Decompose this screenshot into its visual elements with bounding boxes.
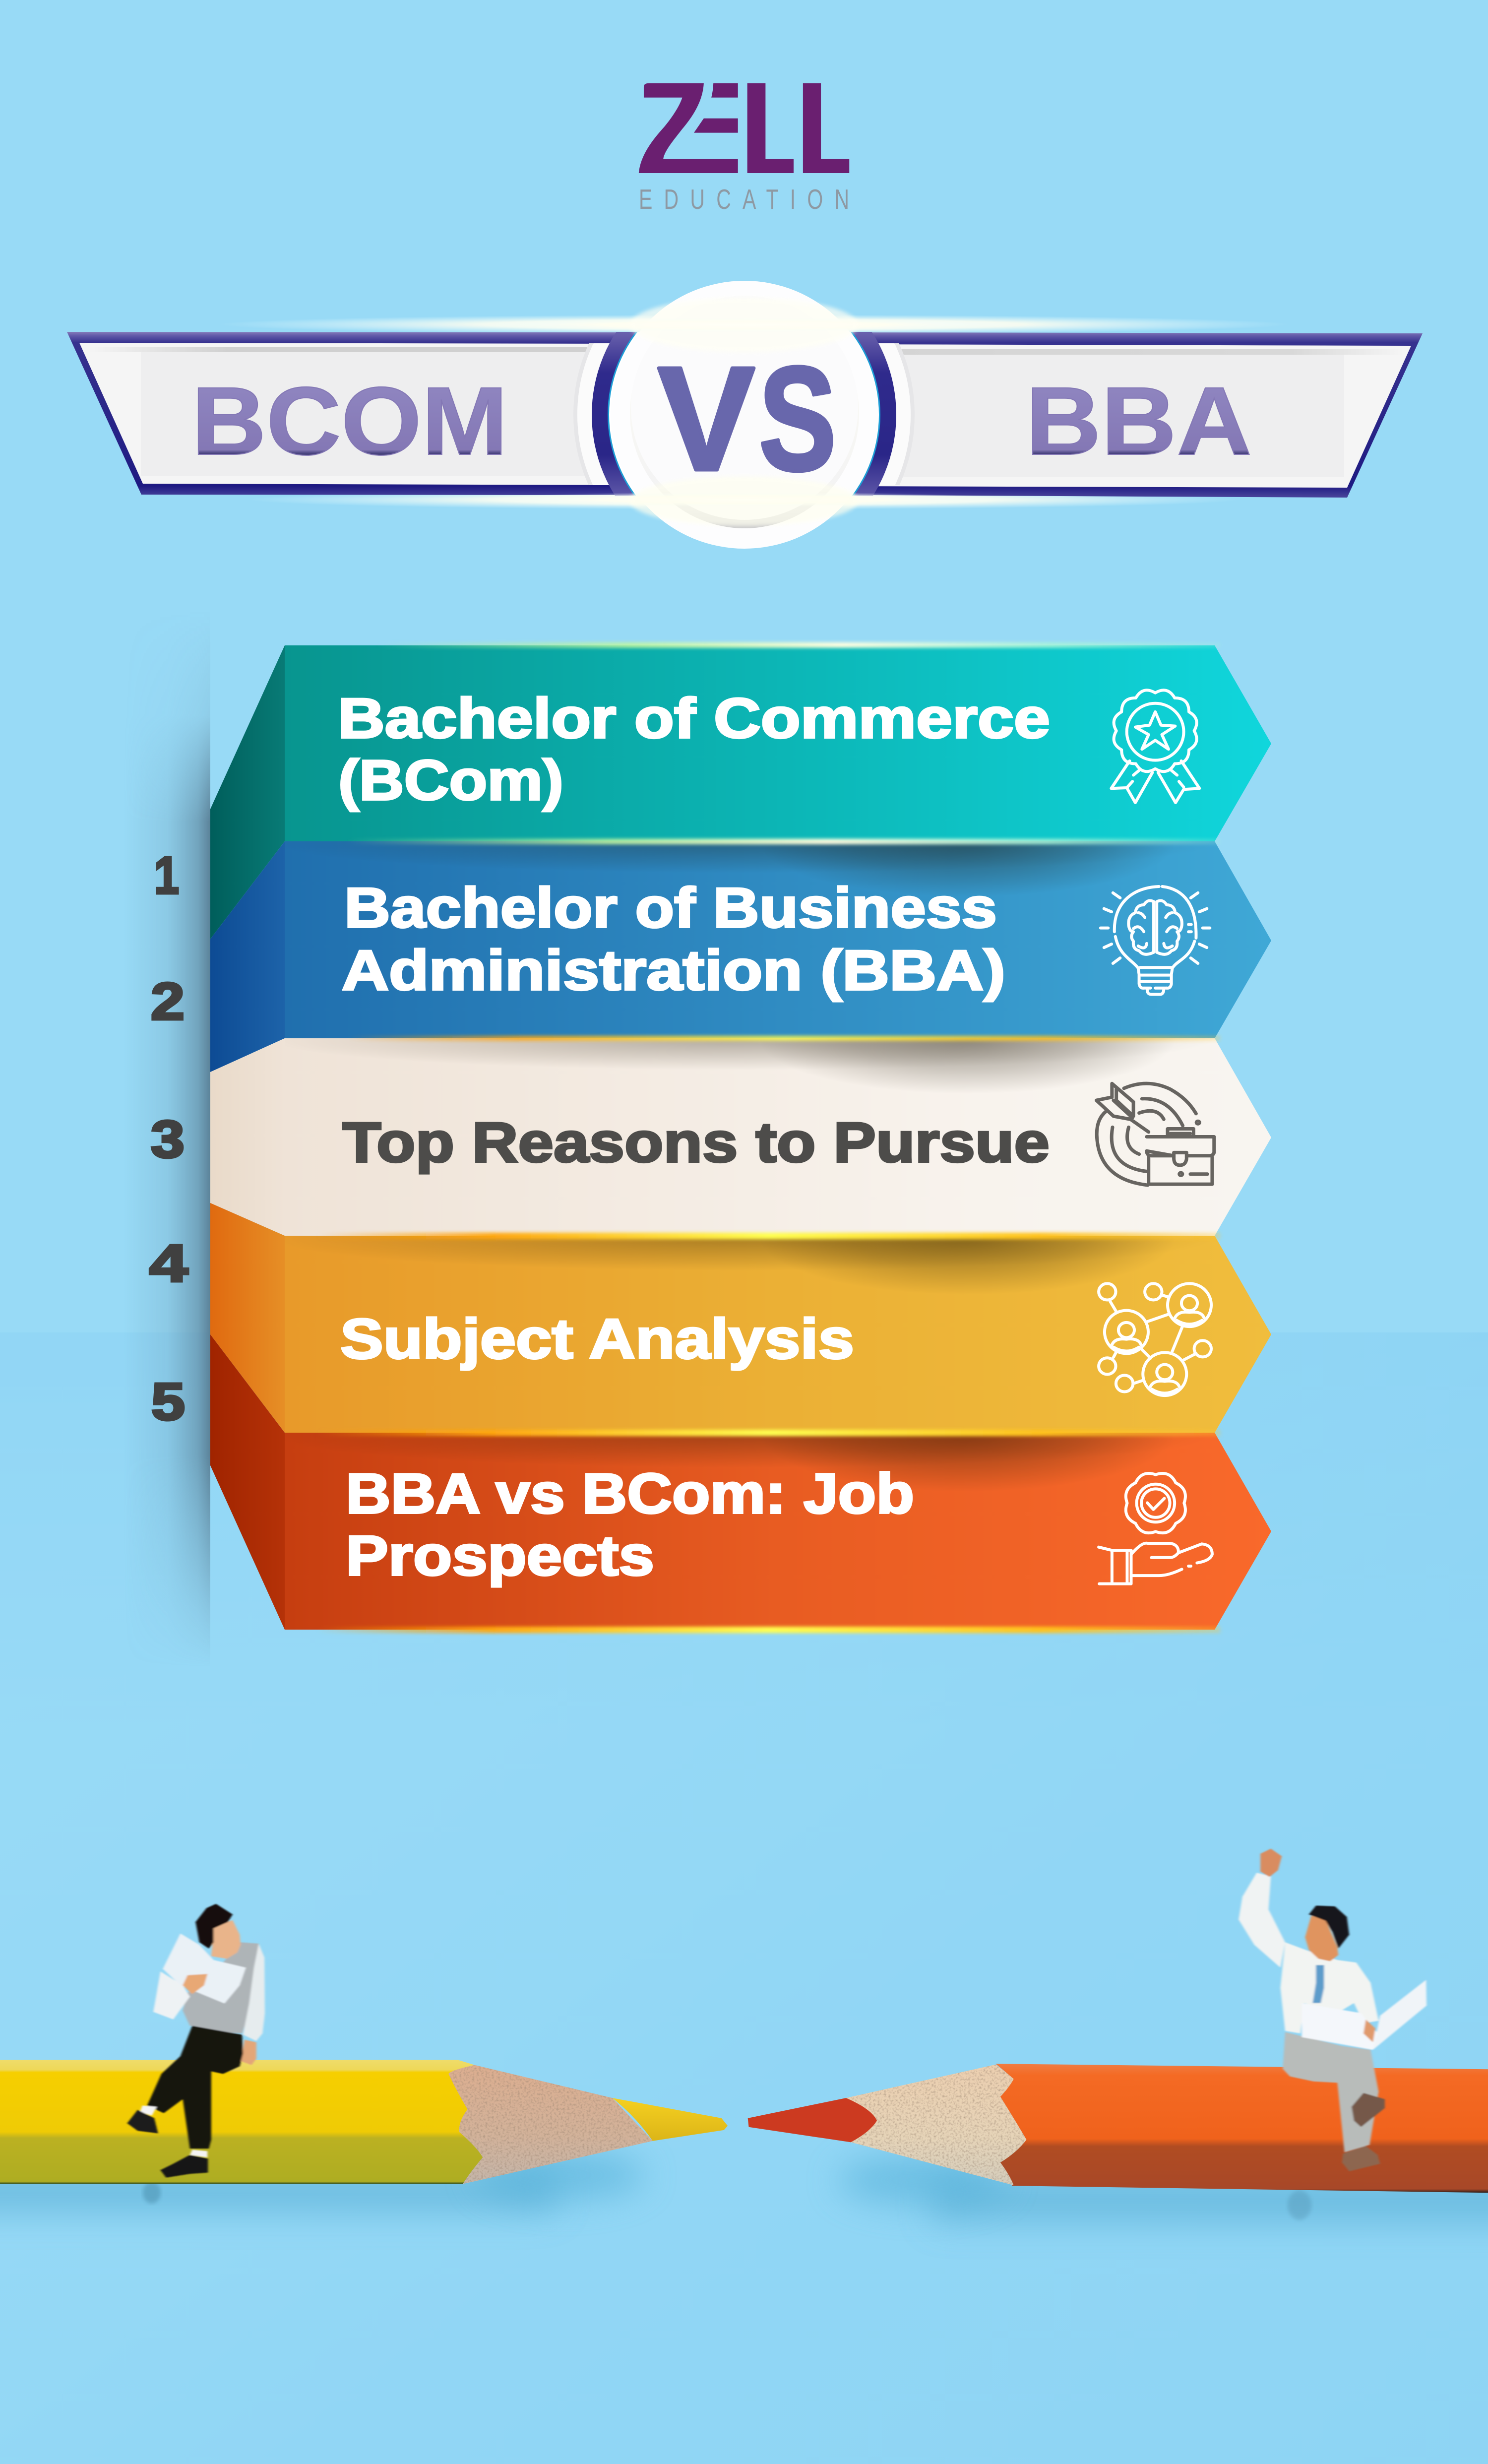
figure: man waving (1239, 1849, 1426, 2171)
panel: BCOM (67, 332, 645, 495)
panel: band 2 Bachelor of Business Administration (210, 841, 1271, 1072)
subheading: (BCom) (338, 749, 563, 812)
yellow pencil with figure (0, 1904, 728, 2184)
pencil body (995, 2064, 1488, 2193)
heading: Subject Analysis (340, 1308, 854, 1371)
icon: people network (1099, 1283, 1211, 1395)
number 2: 2 (151, 972, 185, 1031)
panel rims around disc (577, 343, 911, 485)
figure: man reading (127, 1904, 265, 2178)
panel: band 5 BBA vs BCom Job Prospects (210, 1334, 1271, 1630)
band shadow (273, 1181, 1215, 1295)
wall shadow (143, 667, 210, 1645)
panel: band 1 Bachelor of Commerce (210, 645, 1271, 939)
banner top and bottom glow (218, 315, 1290, 509)
heading: Bachelor of Commerce (338, 687, 1050, 750)
label: VS (658, 336, 836, 502)
label: VS: V (658, 336, 755, 502)
pencil body (0, 2060, 483, 2184)
logo: Zell Education (639, 83, 849, 215)
contents list (124, 610, 1271, 1667)
number 1: 1 (154, 846, 179, 905)
pencil tip (748, 2098, 877, 2142)
label: VS: S (759, 336, 836, 502)
icon: award rosette (1111, 690, 1199, 803)
VS disc (577, 281, 911, 549)
pencil wood (448, 2065, 653, 2184)
logo wordmark: EDUCATION (639, 183, 849, 215)
heading: BBA vs BCom: Job (346, 1462, 914, 1525)
subheading: Prospects (346, 1524, 654, 1587)
band shadow (273, 1378, 1215, 1492)
blue crescents (592, 332, 896, 496)
number 3: 3 (151, 1110, 185, 1169)
disc glint (466, 298, 1022, 526)
band shadow (348, 841, 1170, 892)
pencil shadows (0, 2150, 1488, 2222)
panel: band 3 Top Reasons to Pursue (210, 1038, 1271, 1236)
band edge highlights (317, 642, 1220, 1633)
pencil tip (613, 2098, 728, 2141)
band shadow (273, 985, 1215, 1094)
label: BCOM: BCOM (191, 367, 508, 475)
icon: hand with badge (1099, 1473, 1212, 1584)
panel: band 4 Subject Analysis (210, 1181, 1271, 1433)
orange pencil with figure (748, 1849, 1488, 2193)
icon: brain bulb (1101, 886, 1210, 995)
number 4: 4 (149, 1234, 188, 1293)
icon: target and briefcase (1096, 1083, 1214, 1185)
logo mark (639, 83, 849, 173)
header banner: BCOM vs BBA (67, 281, 1423, 549)
pencil wood (846, 2065, 1026, 2185)
heading: Top Reasons to Pursue (342, 1111, 1050, 1174)
panel: BBA (843, 332, 1423, 498)
label: BBA: BBA (1026, 367, 1252, 475)
subheading: Administration (BBA) (342, 939, 1005, 1002)
number 5: 5 (151, 1373, 185, 1431)
heading: Bachelor of Business (344, 877, 997, 940)
